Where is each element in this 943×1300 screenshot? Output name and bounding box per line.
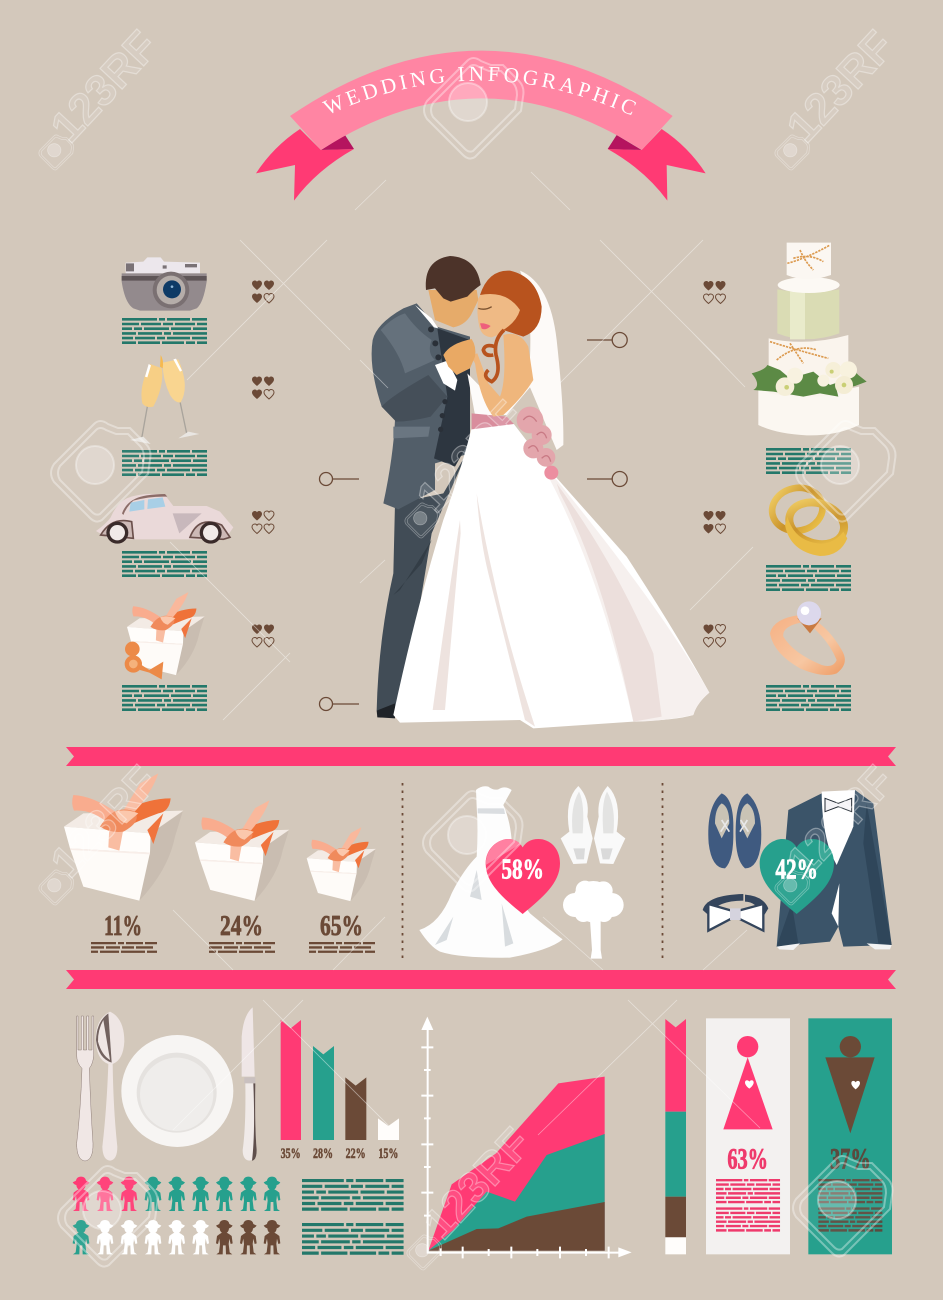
bar 22 percent: [345, 1077, 366, 1140]
gift small: [307, 827, 376, 901]
icon: vintage car: [96, 494, 233, 544]
banner: divider two: [66, 970, 896, 989]
wedding dress: [419, 786, 563, 958]
icon: diamond ring: [770, 601, 845, 675]
bar labels: 22%: [346, 1146, 366, 1162]
knife: [242, 1007, 255, 1077]
row two: [73, 1220, 280, 1254]
text block: gift: [122, 685, 207, 711]
panel: men 37 percent: [808, 1018, 892, 1254]
caption 24: [209, 942, 275, 953]
bride items 58 percent: [419, 786, 625, 959]
percent 65: 65%: [320, 910, 363, 942]
area chart: [421, 1017, 632, 1258]
text block: men: [818, 1179, 882, 1232]
watermark overlay: 123RF: [41, 757, 167, 887]
text block: pictogram one: [302, 1179, 404, 1211]
hearts: gift: [252, 624, 274, 647]
icon: wedding cake: [752, 243, 867, 435]
hearts: camera: [252, 280, 274, 303]
text block: rings: [766, 565, 851, 591]
illustration: bride and groom: [372, 256, 709, 728]
hearts: champagne: [252, 376, 274, 399]
percent 37: 37%: [830, 1143, 871, 1175]
bar labels: 35%: [281, 1146, 301, 1162]
veil: [520, 271, 563, 450]
hearts: car: [252, 511, 274, 534]
stacked ribbon bar: [665, 1019, 686, 1254]
bar labels: [281, 1146, 398, 1162]
groom items 42 percent: [703, 790, 892, 950]
text block: cake: [766, 448, 851, 474]
marker: left and right callout pins: [320, 332, 627, 712]
brown area: [428, 1202, 605, 1251]
heart 42 percent: [760, 839, 834, 914]
title text: WEDDING INFOGRAPHIC: [322, 66, 636, 115]
gift large: [64, 773, 183, 901]
watermark overlay: 123RF: [41, 22, 167, 152]
percent 63: 63%: [727, 1143, 768, 1175]
caption 65: [309, 942, 375, 953]
banner: divider one: [66, 747, 896, 766]
pink area: [428, 1077, 605, 1251]
icon: camera: [122, 257, 207, 311]
fork: [77, 1016, 94, 1161]
men's shoes: [708, 793, 761, 868]
groom cuff and hands: [435, 361, 457, 391]
hearts: diamond ring: [704, 624, 726, 647]
bar labels: 28%: [313, 1146, 333, 1162]
icon: man: [825, 1036, 875, 1133]
chart axes: [421, 1017, 632, 1258]
gift size comparison: [64, 773, 376, 953]
watermark overlay: 123RF: [414, 1119, 540, 1249]
skirt: [393, 423, 709, 728]
row one: [73, 1177, 280, 1211]
watermark overlay: 123RF: [777, 757, 903, 887]
place setting: [77, 1007, 257, 1161]
bar 28 percent: [313, 1046, 334, 1140]
text block: camera: [122, 318, 207, 344]
hearts: rings: [704, 511, 726, 534]
icon: gift with candy: [125, 592, 205, 679]
text block: diamond ring: [766, 685, 851, 711]
bouquet: [563, 881, 624, 959]
heart 42 percent: 42%: [775, 855, 818, 886]
bar 35 percent: [281, 1020, 301, 1140]
bodice: [467, 373, 533, 415]
bride arm and shoulder: [470, 334, 533, 417]
spoon: [96, 1012, 124, 1161]
gift medium: [195, 800, 289, 901]
percent 11: 11%: [104, 910, 142, 942]
watermark overlay: 123RF: [407, 392, 533, 522]
panel: women 63 percent: [706, 1018, 790, 1254]
percent 24: 24%: [220, 910, 263, 942]
plate: [121, 1035, 233, 1147]
text block: women: [716, 1179, 780, 1232]
dotted dividers: [402, 783, 662, 958]
icon: woman: [723, 1036, 773, 1129]
people pictogram: [73, 1177, 280, 1254]
hearts: cake: [704, 281, 726, 304]
bar 15 percent: [378, 1118, 399, 1140]
text block: car: [122, 551, 207, 577]
groom jacket: [372, 303, 470, 509]
title ribbon: [256, 50, 706, 200]
watermark overlay: 123RF: [777, 22, 903, 152]
tuxedo jacket: [777, 790, 892, 950]
caption 11: [91, 942, 157, 953]
groom trousers: [377, 453, 467, 711]
teal area: [428, 1134, 605, 1251]
heart 58 percent: 58%: [501, 855, 544, 886]
heart 58 percent: [486, 839, 560, 914]
bow tie: [703, 894, 768, 931]
icon: gold rings: [768, 483, 849, 556]
bride head: [477, 288, 523, 337]
text block: champagne: [122, 450, 207, 476]
ribbon bar chart: [281, 1020, 399, 1162]
bridal shoes: [561, 786, 625, 864]
bouquet roses: [517, 407, 558, 480]
bar labels: 15%: [378, 1146, 398, 1162]
groom head: [428, 290, 478, 327]
text block: pictogram two: [302, 1223, 404, 1255]
icon: champagne glasses: [130, 355, 199, 444]
